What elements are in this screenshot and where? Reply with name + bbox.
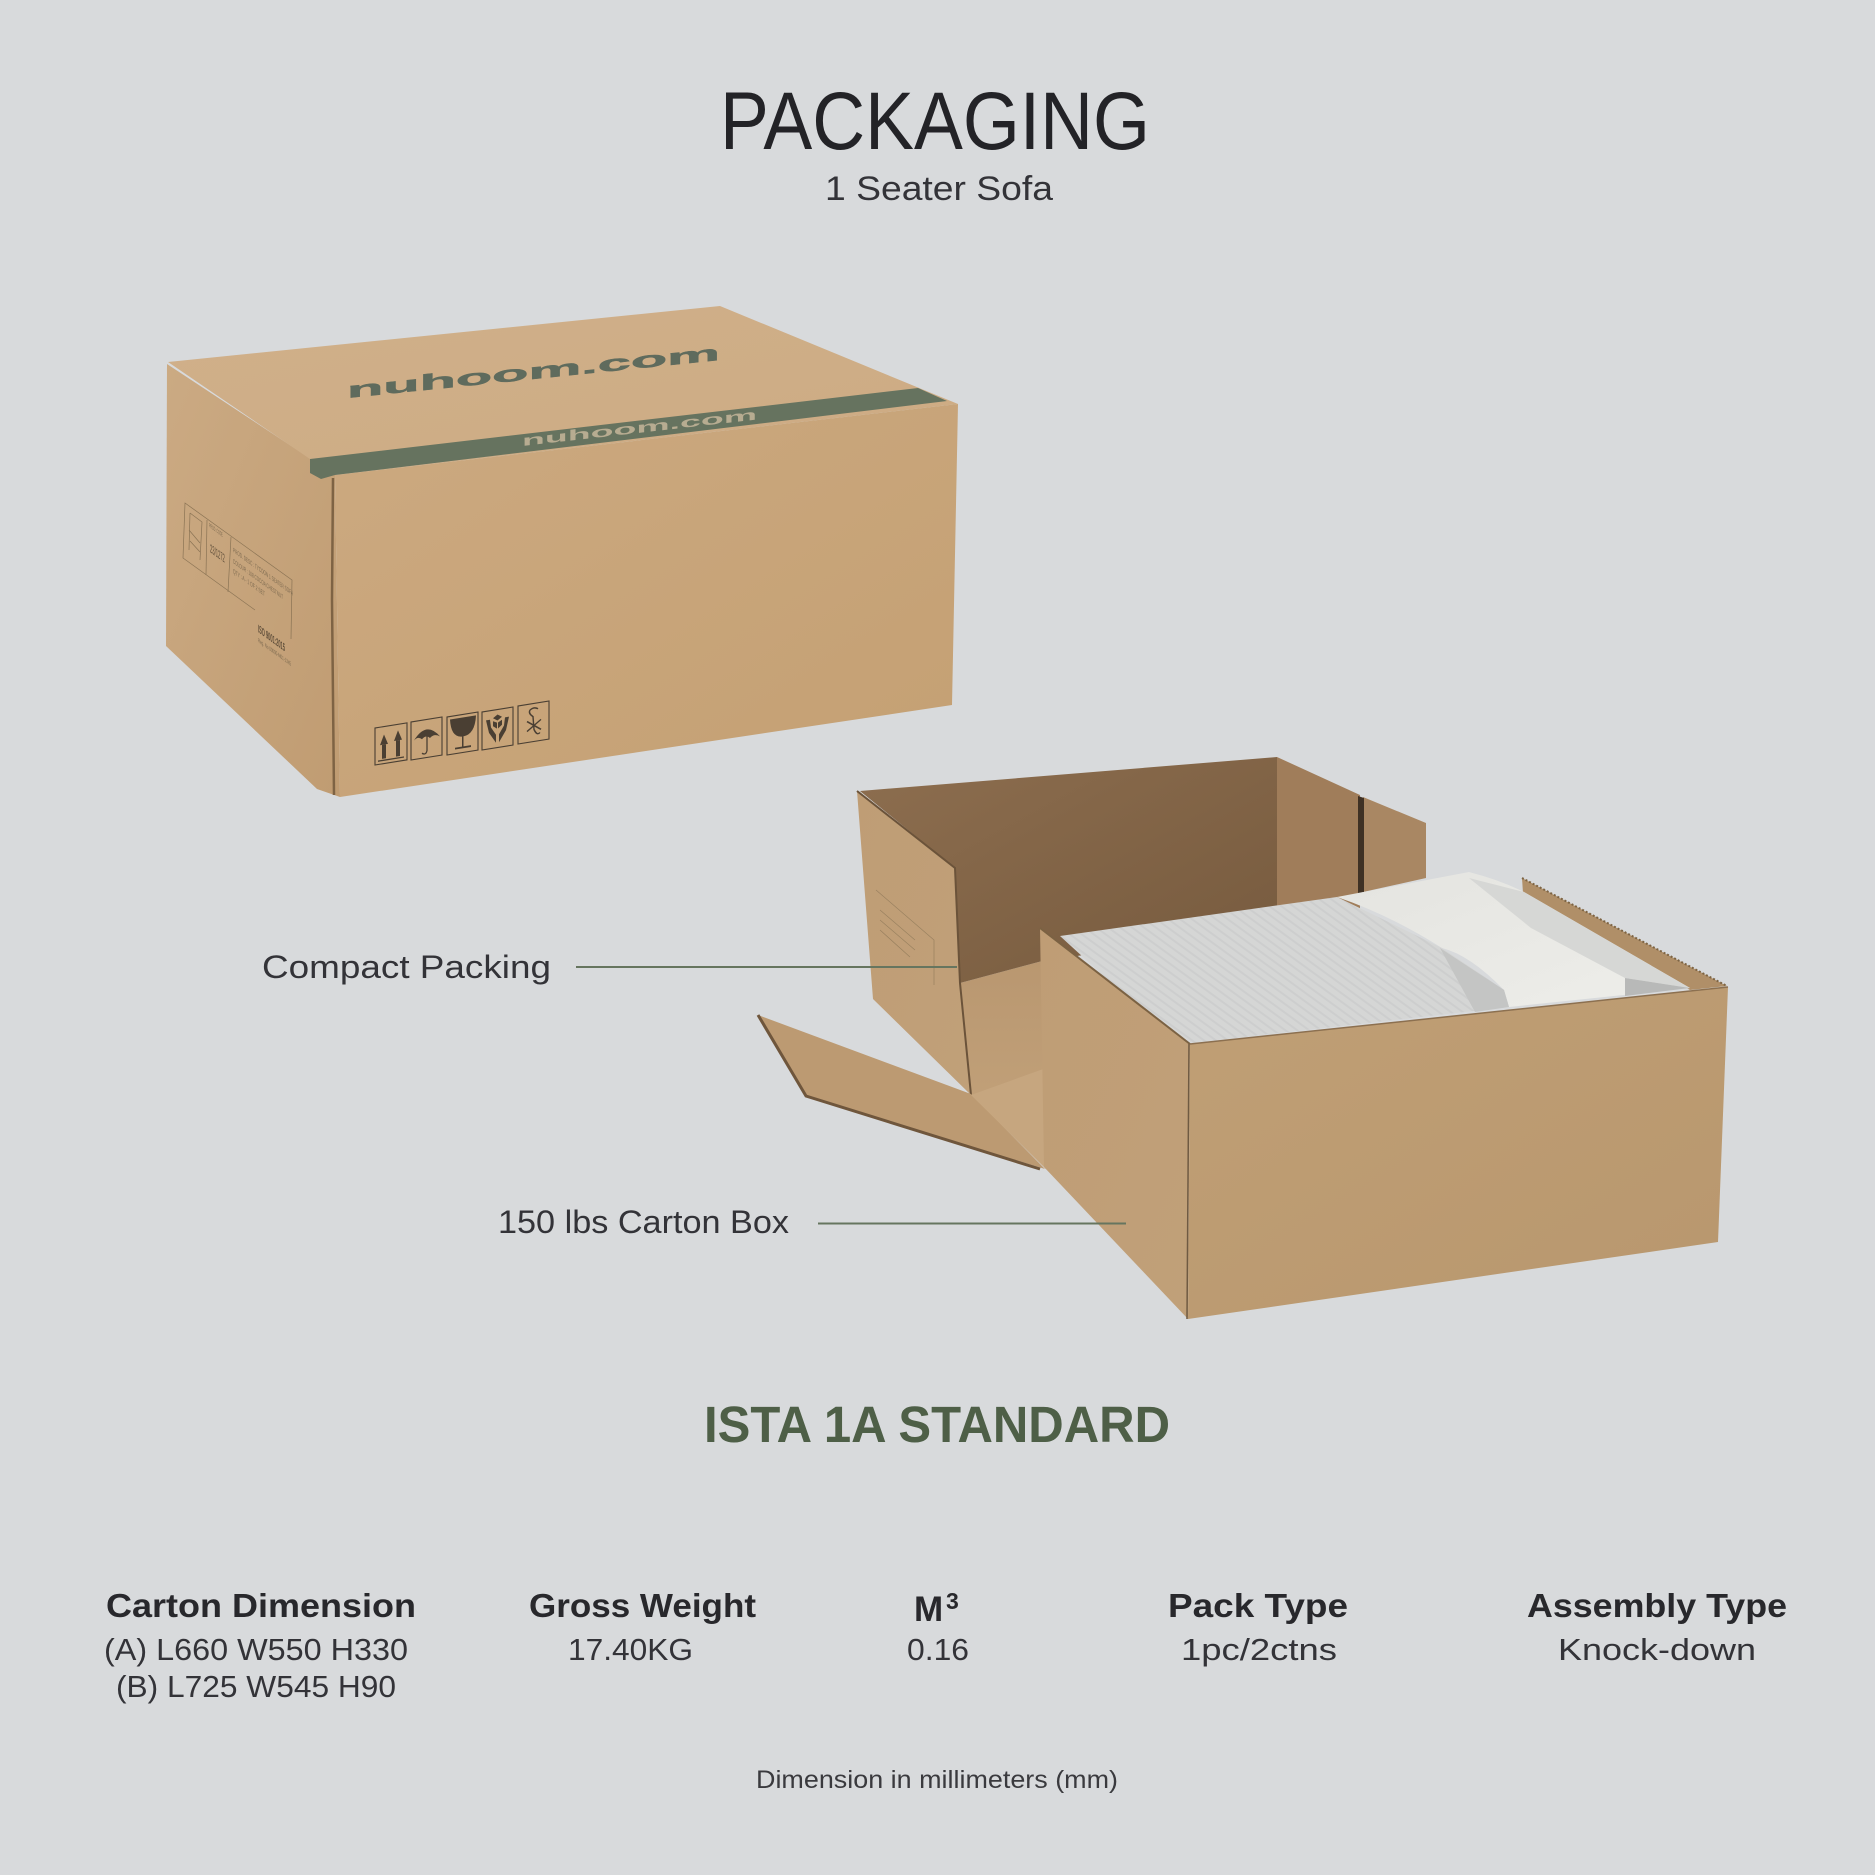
spec: pack type [1168, 1587, 1348, 1667]
heading: Gross Weight [529, 1587, 756, 1624]
heading: Pack Type [1168, 1587, 1348, 1624]
product description: PROD. DESC : TYCOON 1 SEATER SOFA [233, 547, 293, 598]
value: 0.16 [907, 1632, 969, 1667]
quantity: QTY : A - 1 OF 2 SET [233, 568, 265, 599]
open flap [758, 1015, 1045, 1169]
value B: (B) L725 W545 H90 [116, 1669, 396, 1704]
value: Knock-down [1558, 1632, 1756, 1667]
box top face [168, 306, 958, 475]
inner back wall [860, 757, 1277, 983]
value A: (A) L660 W550 H330 [104, 1632, 408, 1667]
leader line [818, 1222, 1126, 1224]
ISO mark: ISO 9001:2015 [258, 621, 285, 654]
product code: PROD. CODE [209, 522, 223, 540]
lower corner fold [971, 1068, 1046, 1169]
spec: volume [907, 1588, 969, 1667]
spec: gross weight [529, 1587, 756, 1667]
icon: no hooks [518, 701, 549, 744]
outer left panel [857, 791, 971, 1095]
inner tray: back flap [1522, 878, 1727, 990]
icon: this way up [375, 723, 407, 765]
colour: COLOUR : 108 COCOA CHESTNUT [233, 558, 283, 602]
ISO reg: Reg. No 00000-M01-1345 [258, 637, 291, 668]
icon: fragile glass [447, 712, 478, 755]
leader line [576, 966, 957, 968]
left wall of box [1040, 928, 1190, 1319]
icon: keep dry umbrella [411, 717, 442, 760]
open carton box [758, 757, 1728, 1319]
seam [332, 478, 334, 795]
green tape [310, 388, 947, 479]
label: Compact Packing [262, 949, 551, 985]
box left face [166, 364, 340, 797]
spec: carton dimension [104, 1587, 416, 1704]
handling icons [375, 701, 549, 765]
panel print [876, 890, 934, 985]
foam wrapped sofa [1060, 897, 1509, 1043]
subtitle: 1 Seater Sofa [825, 170, 1053, 208]
title: PACKAGING [720, 76, 1150, 167]
footnote: Dimension in millimeters (mm) [756, 1766, 1118, 1794]
front wall of box [1188, 987, 1728, 1319]
lid brand text: nuhoom.com [347, 340, 720, 403]
plastic wrap dark corner [1625, 978, 1690, 996]
standard heading: ISTA 1A STANDARD [704, 1396, 1170, 1453]
plastic wrap white [1337, 872, 1690, 1007]
floor of carton lid [960, 960, 1046, 1169]
sofa wrap shadow [1440, 948, 1509, 1012]
heading: Carton Dimension [106, 1587, 416, 1624]
side shipping label [183, 503, 293, 668]
closed carton box [166, 306, 958, 797]
value: 1pc/2ctns [1181, 1632, 1337, 1667]
plastic wrap grey band [1469, 878, 1690, 988]
icon: handle with care [482, 707, 513, 750]
heading: Assembly Type [1527, 1587, 1787, 1624]
heading: 3 [946, 1588, 959, 1614]
value: 17.40KG [568, 1632, 693, 1667]
heading: M [914, 1590, 943, 1629]
tape brand text: nuhoom.com [522, 406, 757, 450]
product code number: 23/1272 [210, 543, 225, 566]
chair outline [189, 513, 202, 560]
spec: assembly type [1527, 1587, 1787, 1667]
box front face [335, 404, 958, 797]
outer right flap [1363, 797, 1426, 892]
dark slot [1358, 796, 1364, 893]
label: 150 lbs Carton Box [498, 1204, 789, 1240]
inner right wall [1277, 757, 1360, 930]
